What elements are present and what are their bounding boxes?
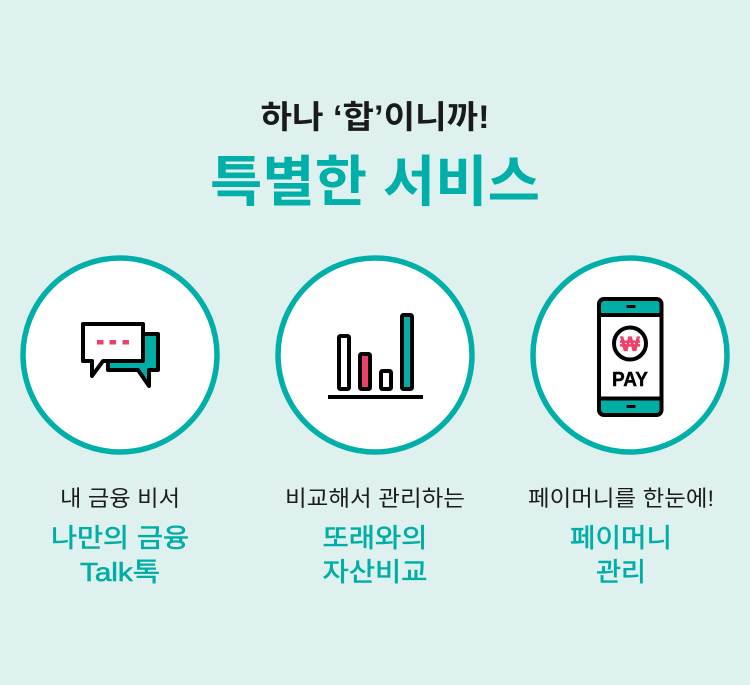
caption: talk: 내 금융 비서	[60, 486, 180, 511]
icon: phone pay	[599, 299, 662, 415]
highlight: talk: Talk톡	[80, 557, 160, 587]
icon: phone pay: PAY	[612, 369, 649, 391]
highlight: pay: 페이머니	[570, 523, 672, 553]
circle: talk	[23, 258, 217, 452]
circle: compare	[278, 258, 472, 452]
caption: pay: 페이머니를 한눈에!	[528, 486, 714, 511]
title: main heading: 특별한 서비스	[210, 151, 540, 213]
highlight: compare: 또래와의	[322, 523, 428, 553]
highlight: pay	[570, 523, 672, 587]
panel: talk	[23, 258, 217, 587]
icon: bar chart	[328, 315, 423, 399]
icon: speech bubbles	[83, 324, 158, 386]
circle: pay	[533, 258, 727, 452]
highlight: talk: 나만의 금융	[51, 523, 189, 553]
caption: compare: 비교해서 관리하는	[285, 486, 465, 511]
panel: pay	[528, 258, 727, 587]
highlight: compare: 자산비교	[322, 557, 428, 587]
title: small heading: 하나 ‘합’이니까!	[260, 99, 490, 135]
highlight: talk	[51, 523, 189, 587]
highlight: compare	[322, 523, 428, 587]
highlight: pay: 관리	[596, 557, 646, 587]
panel: compare	[278, 258, 472, 587]
icon: phone pay: ₩	[620, 333, 640, 356]
